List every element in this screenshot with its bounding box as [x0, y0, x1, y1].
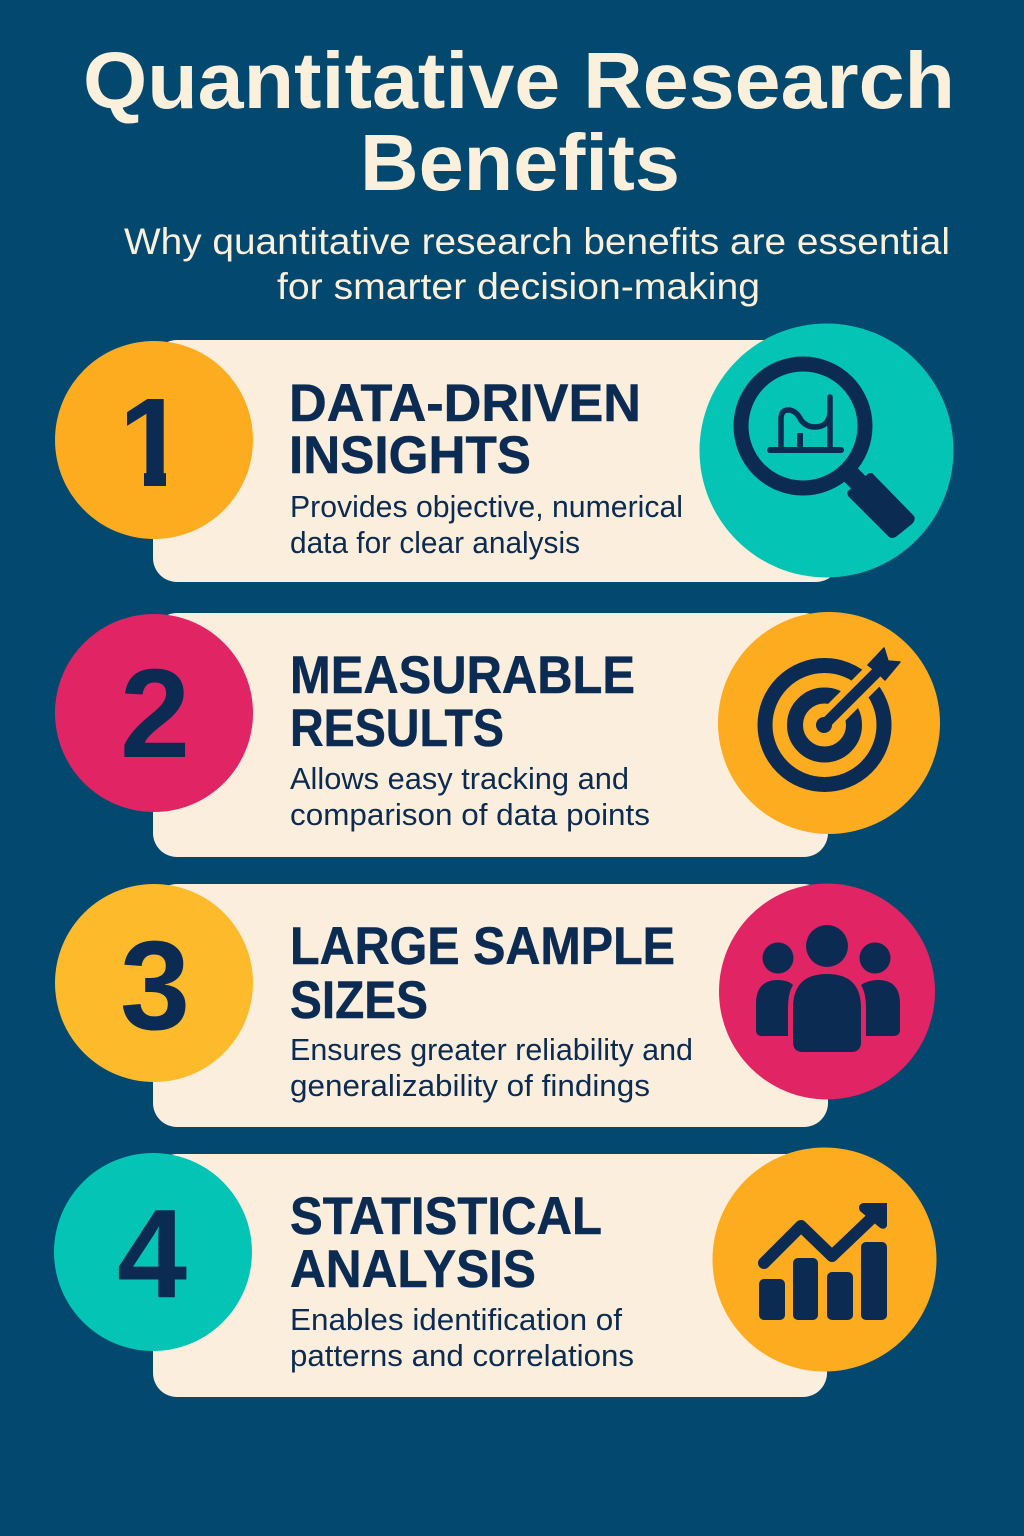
heading: DATA-DRIVEN	[289, 374, 641, 433]
number badge 2	[55, 614, 253, 812]
heading: SIZES	[290, 971, 428, 1030]
subtitle: Why quantitative research benefits are essential	[124, 221, 950, 262]
description	[290, 489, 683, 560]
title	[83, 36, 955, 207]
number badge 1: 1	[117, 372, 187, 513]
panel: measurable results	[55, 612, 940, 857]
icon: rising bar chart	[712, 1148, 936, 1372]
heading	[290, 917, 675, 1030]
card background	[153, 884, 828, 1127]
number badge 4	[54, 1153, 252, 1351]
heading: RESULTS	[290, 699, 504, 758]
title: Benefits	[360, 118, 680, 207]
heading	[289, 374, 641, 485]
description: generalizability of findings	[290, 1068, 650, 1103]
number badge 4: 4	[117, 1183, 187, 1324]
heading	[290, 1187, 602, 1299]
panel: large sample sizes	[55, 884, 935, 1127]
description: Ensures greater reliability and	[290, 1032, 693, 1067]
description: patterns and correlations	[290, 1338, 634, 1373]
description: data for clear analysis	[290, 525, 580, 560]
card background	[153, 613, 828, 857]
subtitle: for smarter decision-making	[277, 266, 760, 307]
heading: STATISTICAL	[290, 1187, 602, 1246]
icon: group of people	[719, 884, 935, 1100]
subtitle	[124, 221, 950, 307]
description	[290, 1032, 693, 1103]
heading: LARGE SAMPLE	[290, 917, 675, 976]
description: Provides objective, numerical	[290, 489, 683, 524]
icon: target with arrow	[718, 612, 940, 834]
title: Quantitative Research	[83, 36, 955, 125]
icon: magnifying glass over chart	[700, 324, 954, 578]
description: Allows easy tracking and	[290, 761, 629, 796]
panel: data-driven insights	[55, 324, 954, 582]
heading: INSIGHTS	[289, 426, 531, 485]
number badge 1	[55, 341, 253, 539]
card background	[153, 1154, 827, 1397]
heading: MEASURABLE	[290, 646, 635, 705]
description: Enables identification of	[290, 1302, 622, 1337]
card background	[153, 340, 840, 582]
panel: statistical analysis	[54, 1148, 936, 1397]
number badge 3	[55, 884, 253, 1082]
description	[290, 761, 650, 832]
heading	[290, 646, 635, 758]
number badge 3: 3	[120, 915, 190, 1056]
number badge 2: 2	[120, 643, 190, 784]
description: comparison of data points	[290, 797, 650, 832]
description	[290, 1302, 634, 1373]
heading: ANALYSIS	[290, 1240, 536, 1299]
